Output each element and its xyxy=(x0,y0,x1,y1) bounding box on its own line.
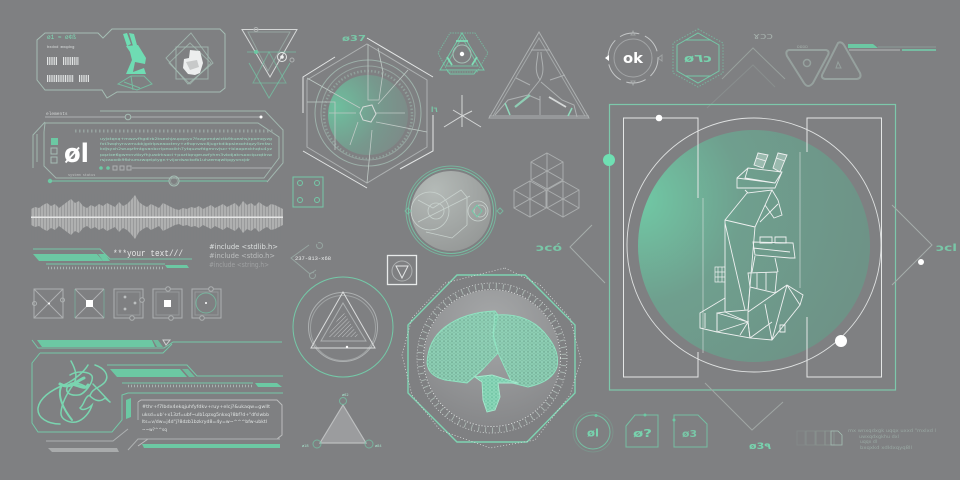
frame xyxy=(32,353,283,432)
box text: #thr+f7lbdx4ekqjuhfyfdkv+ruy+elcj?&ukaqw=gwllt xyxy=(142,404,270,410)
linked triangles xyxy=(786,42,861,86)
badge 02: ø? xyxy=(633,427,652,440)
text box xyxy=(138,400,282,446)
code lines: #include <stdio.h> xyxy=(209,252,275,260)
box text xyxy=(142,404,270,433)
top chevrons xyxy=(707,32,785,108)
top circle ok: ok xyxy=(623,51,644,67)
panel: scanner hexagon xyxy=(303,34,438,188)
badge 01: øl xyxy=(587,426,599,440)
panel: creature and text block xyxy=(32,340,283,452)
triangle vertex labels: ø62 xyxy=(342,393,349,397)
icon row: five target squares xyxy=(32,287,221,320)
top circle ok xyxy=(605,31,662,85)
microscope wireframe xyxy=(700,153,803,340)
side label: l٦ xyxy=(431,106,438,114)
icon: large triangle with curves xyxy=(489,32,589,118)
icon: hex cubes xyxy=(514,153,579,217)
code lines: #include <string.h> xyxy=(209,261,269,269)
bottom chevron xyxy=(705,383,783,452)
badges 01 02 03 xyxy=(573,412,707,452)
icon: nested triangles xyxy=(242,28,297,98)
faded cards xyxy=(797,431,842,445)
box text: ~~w?^^sq xyxy=(142,427,167,433)
card label text: ø1 ≈ ø¢ß xyxy=(47,34,76,41)
chevron label: ɤɔɔ xyxy=(753,32,773,42)
circle with hatched triangle xyxy=(293,277,393,377)
icon: target 1 xyxy=(32,289,64,318)
diamond code tag xyxy=(291,243,331,279)
bottom label: ø3٩ xyxy=(749,442,772,452)
box text: lts=v/dw=j4d"j?8dzb1bzkryd8=4y=w~^^^bfw-ubktl xyxy=(142,419,267,425)
icon: white specimen in diamonds xyxy=(166,33,213,84)
hexagon badge xyxy=(673,29,723,87)
indicator dots xyxy=(603,115,847,347)
faded caption text: uwxqdxgkhu dxl xyxy=(859,434,899,439)
icon: small microscope xyxy=(118,33,152,90)
icon: target 2 xyxy=(75,289,104,318)
panel: brain scan octagon xyxy=(402,268,581,448)
right label: ɔcl xyxy=(936,243,957,254)
icon: target 4 xyxy=(153,287,182,320)
data text block xyxy=(100,136,273,162)
white brackets xyxy=(624,118,882,377)
triangle labels: ɒɒɒɒ xyxy=(797,45,808,50)
data text block: pqzlxe6gwmnvtbyfhjuadrksoci+pxztlqngeuwfyhm3vbdjakrsoxcipzqtlnw xyxy=(100,152,272,157)
triangle vertex labels: ø18 xyxy=(302,444,309,448)
icon: asterisk star xyxy=(444,95,481,127)
white ring xyxy=(627,118,881,372)
green lens xyxy=(328,75,408,155)
data text block: rsjcaoxdk9fbhumzwqelptygn+vijxrdsackofb1uhzemqwltpgyvnxjdr xyxy=(100,157,251,162)
bottom rail: system status xyxy=(68,174,95,178)
icon: framed down triangle xyxy=(388,256,416,284)
faded caption text xyxy=(848,428,936,450)
checkboxes xyxy=(51,138,58,163)
diamond code tag: 237-813-x68 xyxy=(295,256,331,262)
sphere xyxy=(405,166,503,256)
hexagon label: ø37 xyxy=(342,34,366,43)
faded caption text: uqqx dl xyxy=(860,439,877,444)
progress indicator dots xyxy=(99,166,272,170)
box text: uksd=ub'+x13zf=ubf~ulb1qzxg5nkxq?8bf?d+"dfslwbb xyxy=(142,412,269,418)
bar xyxy=(37,340,155,347)
big number: øl xyxy=(64,139,89,169)
barcodes xyxy=(47,61,89,78)
icon: small green square xyxy=(293,177,323,207)
banner text: ***your text/// xyxy=(113,249,183,259)
data text block: fxt3wqhynvzmubkjgdrlpseaoxtmy+zfhqnvwc8jugrkdibpslexohtqzy5mfan xyxy=(100,141,273,146)
icon: target 5 xyxy=(192,287,221,320)
panel: status 01 with data xyxy=(33,111,283,186)
top right bar xyxy=(848,44,936,50)
panel: specimen card xyxy=(37,29,225,98)
faded caption text: mx wnxqdxgk uqqx uxxd "mxlxd l xyxy=(848,428,936,433)
left chevron xyxy=(536,225,605,283)
hexagon badge: ø٦ɔ xyxy=(684,52,712,65)
frame xyxy=(610,104,896,390)
triangle vertex labels: ø84 xyxy=(375,444,382,448)
data text block: kdjsyxh2wuqzfmtgvanbcrlpeoxikh7ytquzwfdgmnvjscr+blaopexkhqtu4yz xyxy=(100,146,272,151)
triangle vertex labels xyxy=(302,393,382,448)
right chevron xyxy=(892,205,957,285)
icon: target 3 xyxy=(114,289,144,320)
bottom rail xyxy=(48,174,267,186)
data text block: uyjxtqnq+mwzvfhgdlrb2ksexhjaupqoyv7fxzgnmdwlctb9kueahsjrpxmqyzg xyxy=(100,136,273,141)
faded caption text: bxqxkd xdldxqyq8ll xyxy=(860,445,912,450)
code lines xyxy=(209,243,278,269)
panel caption: elements xyxy=(46,111,68,117)
brain xyxy=(427,311,558,412)
badge 03: ø3 xyxy=(682,429,697,440)
card small captions: hxdxd mxqdxg xyxy=(47,45,74,50)
green disc xyxy=(638,130,870,362)
icon: creature xyxy=(38,361,110,424)
panel: microscope viewer xyxy=(603,104,896,390)
small grey triangle xyxy=(302,393,382,448)
waveform xyxy=(31,195,283,239)
banner: your text xyxy=(33,249,192,268)
left label: ɔcó xyxy=(536,242,562,254)
code lines: #include <stdlib.h> xyxy=(209,243,278,251)
icon: triangle hex emblem xyxy=(438,33,488,74)
